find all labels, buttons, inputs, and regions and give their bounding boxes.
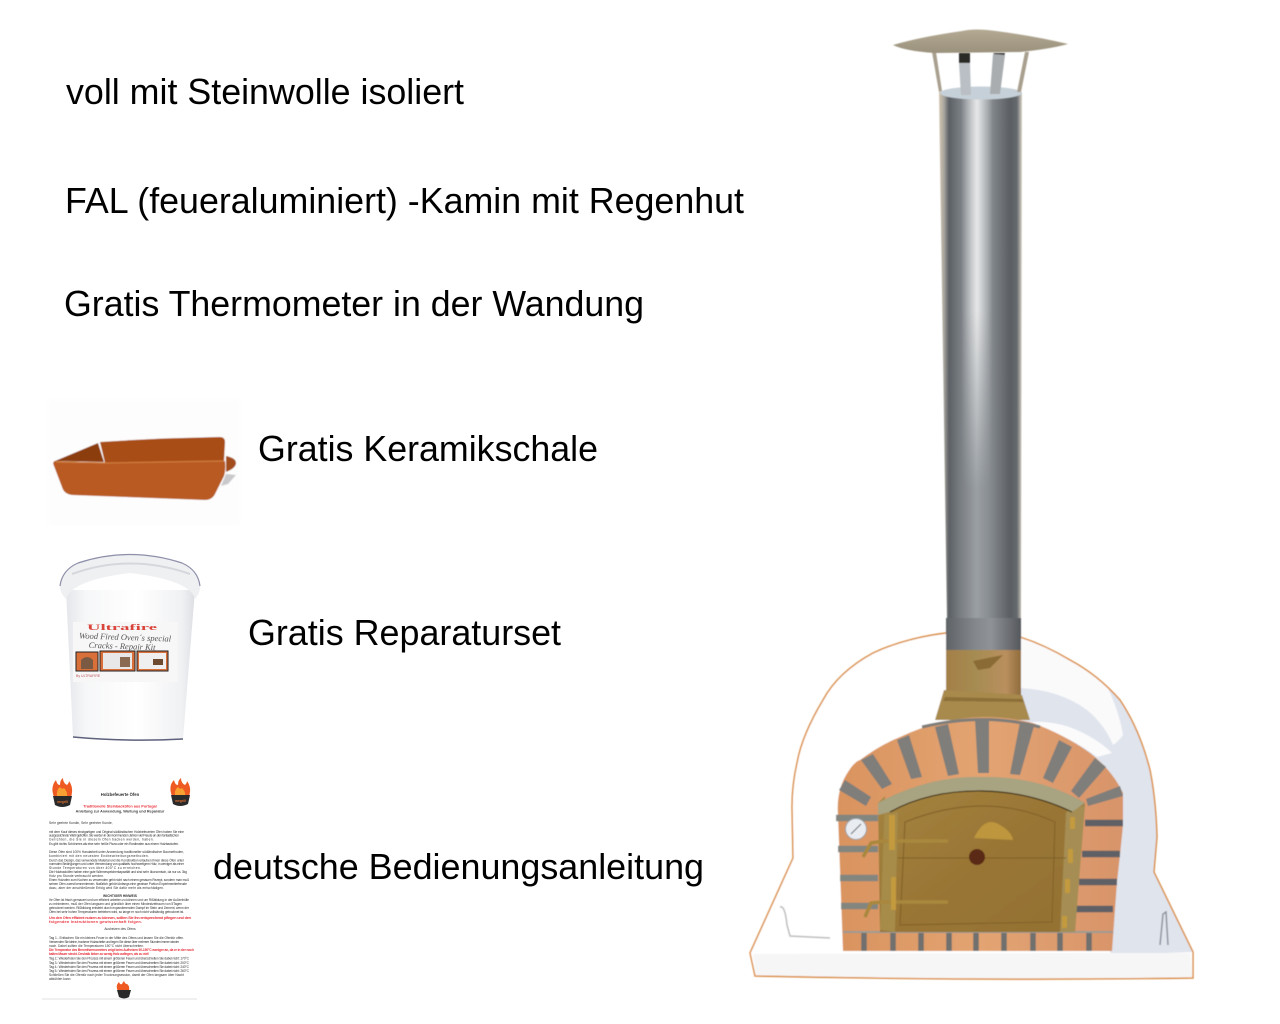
logo: flame top left: megrill: [57, 800, 68, 804]
document body text: nach. Dabei sollten die Temperaturen 150°C nicht überschreiten.: [49, 944, 144, 948]
feature text: Gratis Reparaturset: Gratis Reparaturset: [248, 612, 561, 653]
oven dome and base slab: [750, 633, 1193, 979]
bucket label: [73, 622, 178, 682]
feature text: Gratis Thermometer: Gratis Thermometer in der Wandung: [64, 283, 644, 324]
document body text: Tag 1.. Entfachen Sie ein kleines Feuer in der Mitte des Ofens und lassen Sie die Ofentür offen.: [49, 936, 184, 940]
feature text: deutsche Bedienungsanleitung: deutsche Bedienungsanleitung: [213, 846, 704, 887]
document body text: Schließen Sie die Ofentür nach jeder Trocknungsession, damit der Ofen langsam über Nacht: [49, 973, 184, 977]
document body text: Diese Öfen sind 100% Handarbeit unter Anwendung traditioneller südländischer Baumethoden,: [49, 850, 184, 854]
document body text: dazu, aber der anschließende Erfolg wird Sie dafür mehr als entschädigen.: [49, 886, 164, 890]
document body text: Durch das Design, das verwendete Material und die Konstruktion erlauben Ihnen diese Öfen unter: [49, 858, 185, 862]
logo: flame top right: megrill: [175, 799, 186, 803]
door hinges: [889, 815, 1075, 928]
document body text: Die Temperatur des Brennthermometers zeigt beim Aufheizen 50-150°C weniger an, da er in der noch: [49, 948, 194, 952]
side mortar joints: [836, 818, 1123, 909]
brass collar: [935, 650, 1030, 720]
feature text: Gratis Keramikschale: Gratis Keramikschale: [258, 428, 598, 469]
logo: flame top left: [52, 778, 72, 807]
document body text: Sehr geehrte Kundin, Sehr geehrter Kunde,: [49, 821, 113, 825]
lower latch: [865, 902, 948, 917]
document body text: ausgezeichnete Wahl getroffen. Sie werden in den kommenden Jahren viel Freude an den fantastischen: [49, 834, 179, 838]
document body text: zu minimieren, muß der Ofen langsam und gründlich über einen Mindestzeitraum von 5Tagen: [49, 902, 182, 906]
document body text: WICHTIGER HINWEIS: [103, 894, 138, 898]
rain hat on chimney: [893, 30, 1068, 95]
document body text: abkühlen kann: [49, 977, 71, 981]
upper latch: [863, 841, 948, 857]
bucket label: By ULTRAFIRE: [76, 674, 101, 678]
illustration: wood fired oven with chimney: [750, 30, 1193, 979]
logo: flame top right: [170, 778, 190, 806]
document body text: mit dem Kauf dieses einzigartigen und Original südländischen Holzbefeuerten Öfen haben Sie eine: [49, 830, 184, 834]
oven door: [863, 777, 1085, 932]
document title: Holzbefeuerte Öfen: [101, 792, 140, 797]
document body text: Ausheizen des Ofens: [104, 927, 136, 931]
document body text: Tag 5.: Wiederholen Sie den Prozess mit einem größeren Feuer und überschreiten Sie dabei nicht: 260°C: [49, 969, 190, 973]
document subtitle: Traditionelle Steinbacköfen aus Portugal: [83, 804, 157, 808]
document body text: Die Holzbacköfen haben eine gute Wärmespeicherkapazität und sind sehr ökonomisch, da nur ca. 3kg: [49, 870, 187, 874]
icon: ceramic bowl: [48, 400, 240, 525]
document body text: Es gibt nichts Schöneres als eine sehr heiße Pizza oder ein Rostbraten aus einem Holzbackofen.: [49, 842, 179, 846]
arch mortar joints: [839, 719, 1123, 806]
document body text: kalten Mauer steckt. Deshalb lieber zu wenig Holz auflegen, als zu viel!: [49, 952, 149, 956]
bucket label: Cracks - Repair Kit: [89, 640, 156, 652]
document body text: getrocknet werden. Rißbildung entsteht durch expandierenden Dampf im Stein und Zement, wenn der: [49, 906, 190, 910]
document subheading: Anleitung zur Anwendung, Wartung und Reparatur: [76, 810, 165, 814]
bottom brick row joints: [864, 933, 1089, 951]
logo: flame bottom: [117, 981, 131, 998]
document body text: Um den Ofen effizient nutzen zu können, sollten Sie ihn entsprechend pflegen und den: [49, 916, 192, 920]
document body text: Einen Holzofen zum Kochen zu verwenden geht nicht nach einem genauen Rezept, sondern man muß: [49, 878, 189, 882]
bucket label: Ultrafire: [87, 623, 158, 632]
document body text: [49, 821, 194, 981]
document body text: Tag 4.: Wiederholen Sie den Prozess mit einem größeren Feuer und überschreiten Sie dabei nicht: 240°C: [49, 965, 190, 969]
document: instruction manual: [42, 778, 197, 1000]
door handle plate: [974, 822, 1013, 840]
document body text: Ihr Ofen ist frisch gemauert und um effizient arbeiten zu können und um Rißbildung in der Außenhülle: [49, 898, 189, 902]
feature text: FAL-Kamin mit Regenhut: FAL (feueraluminiert) -Kamin mit Regenhut: [65, 180, 744, 221]
document body text: folgenden Instruktionen gewissenhaft folgen.: [49, 920, 142, 924]
feature text: voll mit Steinwolle isoliert: voll mit Steinwolle isoliert: [66, 71, 464, 112]
document body text: kombiniert mit den neuesten Endbearbeitungsmethoden.: [49, 854, 149, 858]
chimney pipe: [939, 86, 1022, 651]
document body text: Holz pro Stunde verbraucht werden.: [49, 874, 104, 878]
document body text: Gerichten, die Sie in diesem Ofen backen werden, haben.: [49, 838, 154, 842]
document body text: Verwenden Sie kleine, trockene Holzscheite und legen Sie diese über mehrere Stunden immer wieder: [49, 940, 180, 944]
document body text: Tag 3.: Wiederholen Sie den Prozess mit einem größeren Feuer und überschreiten Sie dabei nicht: 200°C: [49, 961, 190, 965]
thermometer: [846, 818, 866, 840]
document body text: Tag 2.: Wiederholen Sie den Prozess mit einem größeren Feuer und überschreiten Sie dabei nicht: 170°C: [49, 956, 190, 960]
door vent knob: [969, 849, 985, 865]
document body text: normalen Bedingungen und unter Verwendung von qualitativ hochwertigem Holz, in weniger als einer: [49, 862, 185, 866]
icon: repair kit bucket: [60, 554, 200, 740]
document body text: Ofen bei sehr hohen Temperaturen betrieben wird, so lange er noch nicht vollständig getrocknet ist.: [49, 910, 184, 914]
brick arch and oven front: [836, 717, 1123, 951]
bucket label: Wood Fired Oven´s special: [79, 630, 172, 644]
document body text: Stunde Temperaturen von über 400°C zu erreichen.: [49, 866, 141, 870]
document body text: seinen Ofen zuerst kennenlernen. Natürlich gehört Anfangs eine gewisse Portion Experimentierfreude: [49, 882, 187, 886]
